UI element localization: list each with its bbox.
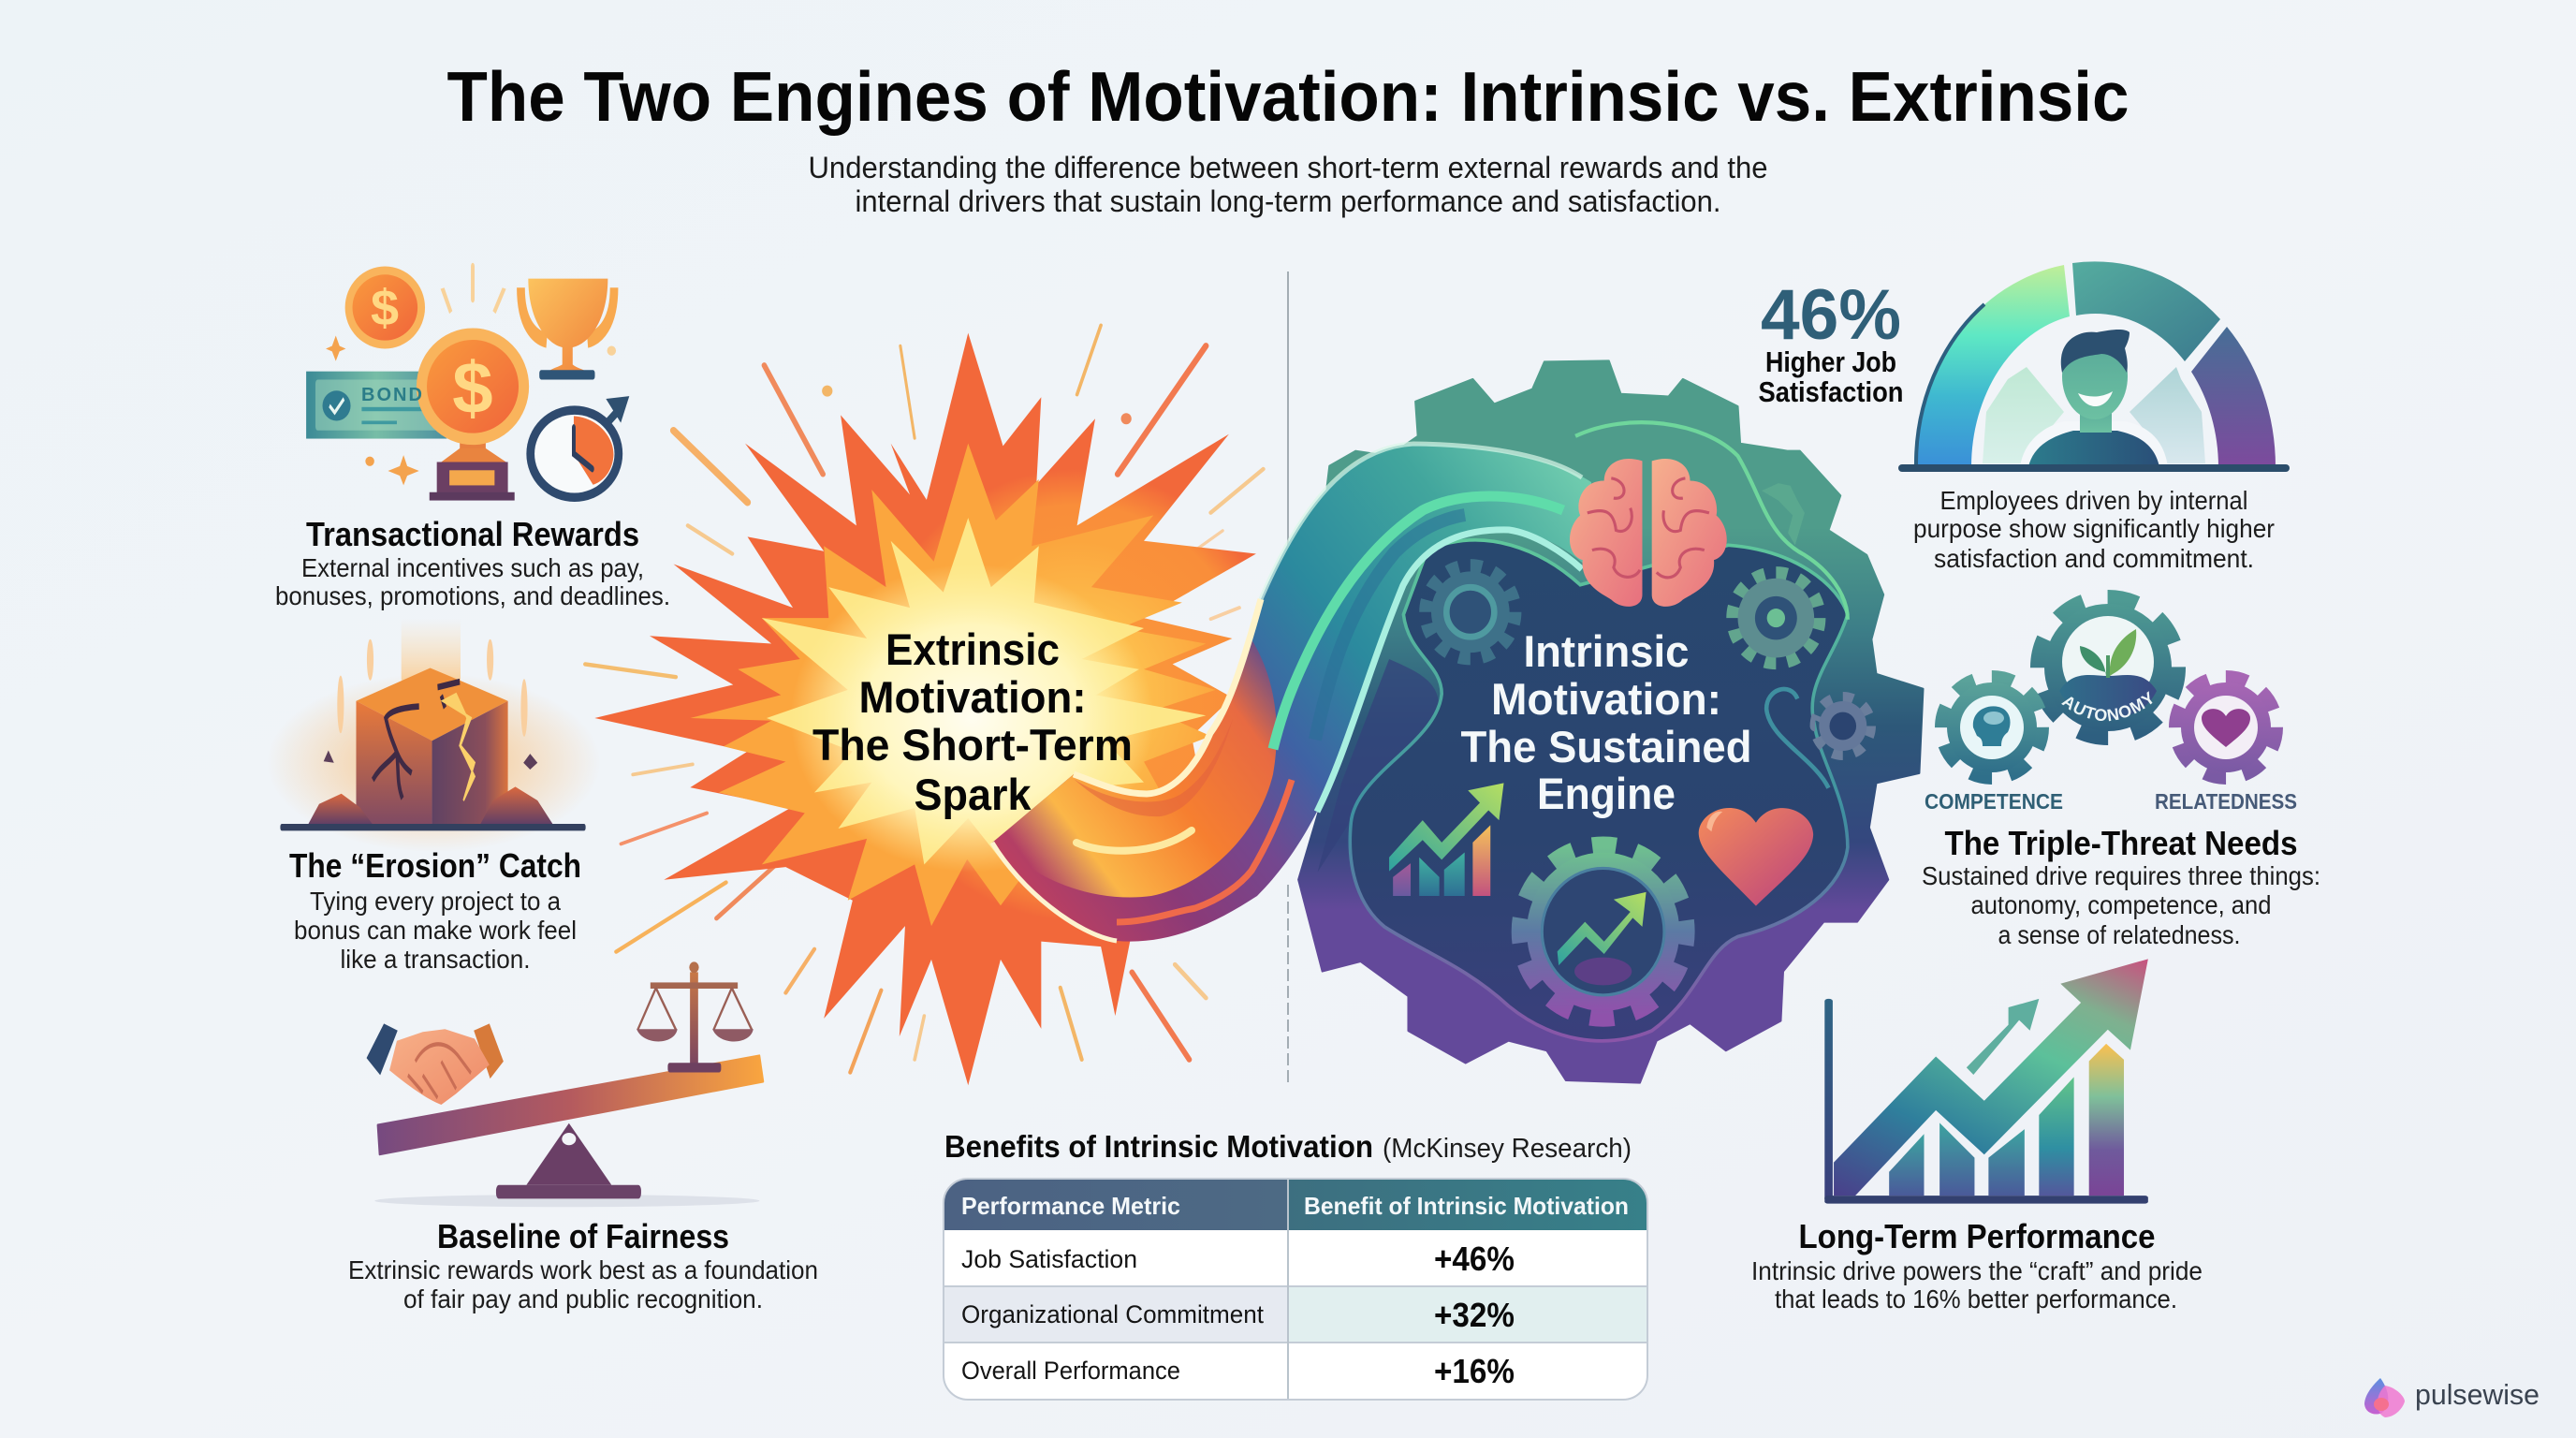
gear captions <box>1925 789 2297 814</box>
gear inner icons <box>1389 459 1870 1016</box>
person <box>2020 330 2168 467</box>
gear: autonomy <box>2030 590 2186 745</box>
text: baseline of fairness: of fair pay and public recognition. <box>403 1284 763 1313</box>
icon: stopwatch <box>526 396 629 502</box>
text: transactional rewards: Transactional Rewards <box>306 515 639 553</box>
burst sparks <box>585 325 1264 1072</box>
subtitle: Understanding the difference between short-term external rewards and the <box>809 151 1767 184</box>
scales <box>637 961 754 1072</box>
sparkles <box>326 263 616 485</box>
table heading <box>944 1129 1632 1164</box>
flowing ribbon connecting burst to gear <box>992 444 1591 942</box>
text: baseline of fairness: Baseline of Fairness <box>437 1217 729 1255</box>
icon: three gears of needs <box>1925 590 2297 814</box>
text: employees <box>1913 486 2275 573</box>
icon: teal cog upper left <box>1427 566 1515 657</box>
text: triple threat needs: The Triple-Threat Needs <box>1945 824 2297 862</box>
icon: fairness seesaw with scales and handshake <box>367 961 763 1207</box>
text: erosion catch: like a transaction. <box>341 945 530 974</box>
fulcrum <box>526 1123 611 1185</box>
text: triple threat needs: autonomy, competence, and <box>1971 890 2271 919</box>
icon: bar chart with arrow <box>1389 783 1504 896</box>
text: erosion catch: Tying every project to a <box>310 887 561 916</box>
icon: brain <box>1570 459 1727 607</box>
dollar signs: $ <box>452 346 493 429</box>
icon: bond certificate <box>306 372 446 439</box>
ribbon orange stream <box>998 639 1277 897</box>
gear: relatedness <box>2177 679 2275 776</box>
table values: +16% <box>1434 1352 1515 1390</box>
burst star layers <box>594 333 1256 1085</box>
text: erosion catch: The “Erosion” Catch <box>289 846 581 885</box>
ribbon base <box>992 444 1591 942</box>
light fans <box>1983 367 2064 463</box>
table values: +32% <box>1434 1296 1515 1334</box>
panel: intrinsic gear <box>1298 360 1923 1083</box>
table metric names <box>961 1245 1264 1385</box>
subtitle <box>809 151 1767 218</box>
extrinsic label <box>812 624 1133 819</box>
intrinsic label <box>1460 626 1752 818</box>
text: employees: purpose show significantly higher <box>1913 514 2275 543</box>
gear inner dark field <box>1318 422 1848 1041</box>
logo: pulsewise <box>2364 1378 2539 1417</box>
table header labels <box>961 1192 1629 1220</box>
table heading: (McKinsey Research) <box>1383 1134 1632 1164</box>
intrinsic label: Intrinsic <box>1524 626 1689 676</box>
text: triple threat needs <box>1922 824 2320 949</box>
table metric names: Job Satisfaction <box>961 1245 1137 1273</box>
stat: 46 percent: 46% <box>1761 275 1901 355</box>
logo: pulsewise: pulsewise <box>2415 1378 2539 1411</box>
icon: trophy <box>520 279 614 379</box>
small arrow <box>1967 999 2039 1075</box>
icon: eroding cube <box>268 619 600 852</box>
icon: small grey cog <box>1815 697 1870 755</box>
text: long-term performance <box>1751 1217 2203 1313</box>
text: baseline of fairness: Extrinsic rewards work best as a foundation <box>348 1255 818 1284</box>
table body <box>944 1179 1647 1400</box>
plank <box>377 1056 763 1154</box>
icon: coin on stand <box>417 328 529 501</box>
text: employees: satisfaction and commitment. <box>1934 544 2254 573</box>
title: The Two Engines of Motivation: Intrinsic vs. Extrinsic <box>447 57 2129 136</box>
panel: extrinsic starburst <box>585 325 1264 1085</box>
icon: heart <box>1699 808 1813 906</box>
gear: autonomy: AUTONOMY <box>2061 691 2153 721</box>
table header labels: Benefit of Intrinsic Motivation <box>1304 1192 1629 1220</box>
handshake <box>367 1023 504 1105</box>
text: long-term performance: that leads to 16% better performance. <box>1775 1284 2177 1313</box>
table values <box>1434 1240 1515 1390</box>
dollar signs: $ <box>371 280 399 336</box>
text: long-term performance: Long-Term Performance <box>1799 1217 2155 1255</box>
subtitle: internal drivers that sustain long-term performance and satisfaction. <box>856 184 1720 218</box>
text: long-term performance: Intrinsic drive powers the “craft” and pride <box>1751 1256 2203 1285</box>
text: baseline of fairness <box>348 1217 818 1313</box>
extrinsic label: Spark <box>914 770 1032 819</box>
extrinsic label: The Short-Term <box>812 720 1133 770</box>
center divider <box>1287 271 1289 1086</box>
intrinsic label: The Sustained <box>1460 722 1752 771</box>
icon: long-term performance chart <box>1824 959 2148 1204</box>
dollar signs <box>371 280 493 429</box>
gear captions: RELATEDNESS <box>2155 789 2297 814</box>
gauge base line <box>1898 464 2290 472</box>
text: transactional rewards: bonuses, promotions, and deadlines. <box>275 581 670 610</box>
extrinsic label: Extrinsic <box>886 624 1060 674</box>
benefits table <box>944 1179 1647 1400</box>
icon: green cog right <box>1733 573 1819 663</box>
seesaw shadow <box>374 1195 759 1207</box>
stat: 46 percent: Satisfaction <box>1758 375 1904 408</box>
gauge segments <box>1914 261 2276 467</box>
icon: large gear with arrow <box>1522 847 1684 1016</box>
table metric names: Overall Performance <box>961 1357 1180 1385</box>
text: erosion catch <box>289 846 581 974</box>
icon: satisfaction gauge with person <box>1898 261 2290 472</box>
table heading: Benefits of Intrinsic Motivation <box>944 1129 1373 1164</box>
axes <box>1824 999 1833 1201</box>
swirl <box>1766 689 1828 788</box>
bars <box>1889 1134 1924 1196</box>
table metric names: Organizational Commitment <box>961 1300 1264 1328</box>
table header labels: Performance Metric <box>961 1192 1180 1220</box>
gear: competence <box>1943 679 2041 776</box>
intrinsic label: Motivation: <box>1491 674 1721 724</box>
text: transactional rewards: External incentives such as pay, <box>301 553 644 582</box>
intrinsic label: Engine <box>1537 769 1676 818</box>
stat: 46 percent: Higher Job <box>1765 345 1896 378</box>
gear body <box>1298 360 1923 1083</box>
main arrow <box>1834 959 2148 1196</box>
text: triple threat needs: Sustained drive requires three things: <box>1922 861 2320 890</box>
icon: small coin <box>345 266 425 348</box>
extrinsic label: Motivation: <box>859 672 1086 722</box>
bond text: BOND <box>361 385 424 405</box>
table values: +46% <box>1434 1240 1515 1278</box>
text: employees: Employees driven by internal <box>1939 486 2248 515</box>
text: transactional rewards <box>275 515 670 610</box>
text: erosion catch: bonus can make work feel <box>294 916 577 945</box>
text: triple threat needs: a sense of relatedness. <box>1998 920 2241 949</box>
stat: 46 percent <box>1758 275 1904 408</box>
gear captions: COMPETENCE <box>1925 789 2063 814</box>
icon: transactional rewards cluster <box>306 263 629 502</box>
